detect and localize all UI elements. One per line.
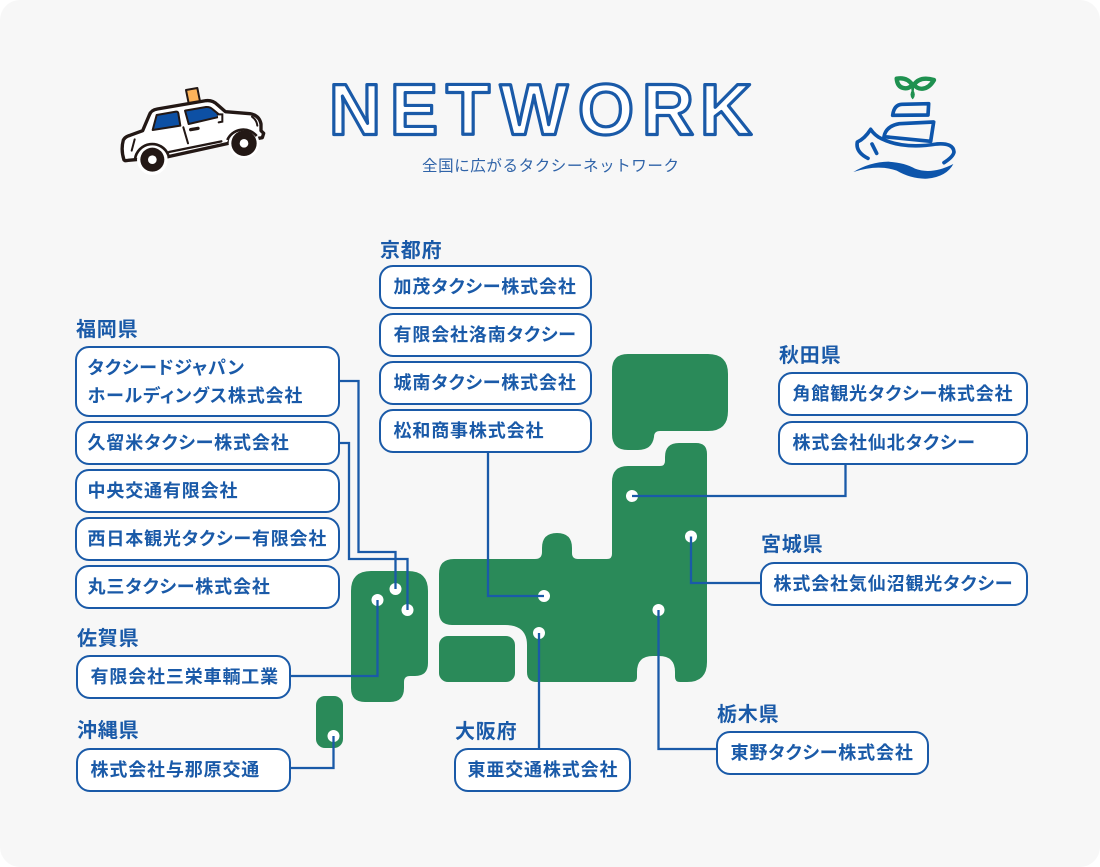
company: Taxi D Japan Holdings: ホールディングス株式会社 [88, 386, 303, 406]
heading: Saga: 佐賀県 [77, 628, 139, 650]
company: Marusan Taxi: 丸三タクシー株式会社 [88, 577, 271, 597]
company: Jonan Taxi [379, 361, 592, 405]
heading: Okinawa: 沖縄県 [77, 720, 139, 742]
company: Senboku Taxi: 株式会社仙北タクシー [792, 433, 976, 453]
company: Rakunan Taxi: 有限会社洛南タクシー [394, 325, 577, 345]
company: Showa Shoji [379, 409, 592, 453]
heading: Miyagi: 宮城県 [761, 534, 823, 556]
company: Rakunan Taxi [379, 313, 592, 357]
company: Taxi D Japan Holdings: タクシードジャパン [88, 358, 245, 378]
panel: Kyoto [379, 240, 592, 453]
company: Kesennuma Kanko Taxi [760, 562, 1028, 606]
car body [122, 101, 264, 161]
company: Higashino Taxi [716, 731, 929, 775]
company: Kakunodate Kanko Taxi [778, 372, 1028, 416]
company: Senboku Taxi [778, 421, 1028, 465]
location dots [328, 490, 697, 742]
panel: Fukuoka [75, 318, 340, 609]
company: Taxi D Japan Holdings [75, 346, 340, 417]
Hokkaido [612, 354, 728, 450]
heading: Kyoto: 京都府 [380, 240, 442, 262]
roof sign [186, 88, 200, 103]
panel: Osaka [454, 720, 631, 792]
panel: Akita [778, 345, 1028, 465]
panel: Okinawa [76, 720, 291, 792]
company: Jonan Taxi: 城南タクシー株式会社 [394, 373, 577, 393]
company: Sanei Sharyo Kogyo: 有限会社三栄車輌工業 [90, 667, 279, 687]
Kyushu [351, 571, 428, 702]
wave [853, 162, 953, 179]
company: Nishinihon Kanko Taxi: 西日本観光タクシー有限会社 [88, 529, 327, 549]
heading: Akita: 秋田県 [779, 345, 841, 367]
wheels [137, 144, 168, 175]
panel: Saga [76, 628, 291, 699]
company: Yonabaru Kotsu [76, 748, 291, 792]
car details [132, 114, 257, 152]
windows [153, 112, 180, 130]
connector lines [289, 381, 846, 768]
company: Kakunodate Kanko Taxi: 角館観光タクシー株式会社 [792, 384, 1013, 404]
company: Higashino Taxi: 東野タクシー株式会社 [730, 743, 914, 763]
icon: ship with sprout [854, 76, 956, 179]
company: Chuo Kotsu [75, 469, 340, 513]
company: Kurume Taxi [75, 421, 340, 465]
company: Marusan Taxi [75, 565, 340, 609]
company: Kamo Taxi [379, 265, 592, 309]
sprout [897, 78, 934, 99]
company: Chuo Kotsu: 中央交通有限会社 [88, 481, 238, 501]
icon: taxi [120, 87, 266, 172]
company: Kurume Taxi: 久留米タクシー株式会社 [88, 433, 290, 453]
heading: Tochigi: 栃木県 [717, 704, 779, 726]
ship outline [857, 104, 954, 163]
heading: Osaka: 大阪府 [455, 721, 517, 743]
company: Yonabaru Kotsu: 株式会社与那原交通 [90, 760, 260, 780]
company: Toa Kotsu: 東亜交通株式会社 [468, 760, 618, 780]
company: Nishinihon Kanko Taxi [75, 517, 340, 561]
panel: Miyagi [760, 534, 1028, 606]
company: Toa Kotsu [454, 748, 631, 792]
title: NETWORK [329, 70, 752, 150]
company: Kesennuma Kanko Taxi: 株式会社気仙沼観光タクシー [774, 574, 1013, 594]
panel: Tochigi [716, 704, 929, 775]
subtitle: 全国に広がるタクシーネットワーク [422, 158, 680, 174]
Okinawa [316, 696, 343, 748]
company: Kamo Taxi: 加茂タクシー株式会社 [394, 277, 577, 297]
company: Sanei Sharyo Kogyo [76, 655, 291, 699]
heading: Fukuoka: 福岡県 [76, 319, 138, 341]
company: Showa Shoji: 松和商事株式会社 [394, 421, 544, 441]
Shikoku [439, 636, 515, 682]
Honshu [439, 443, 707, 682]
